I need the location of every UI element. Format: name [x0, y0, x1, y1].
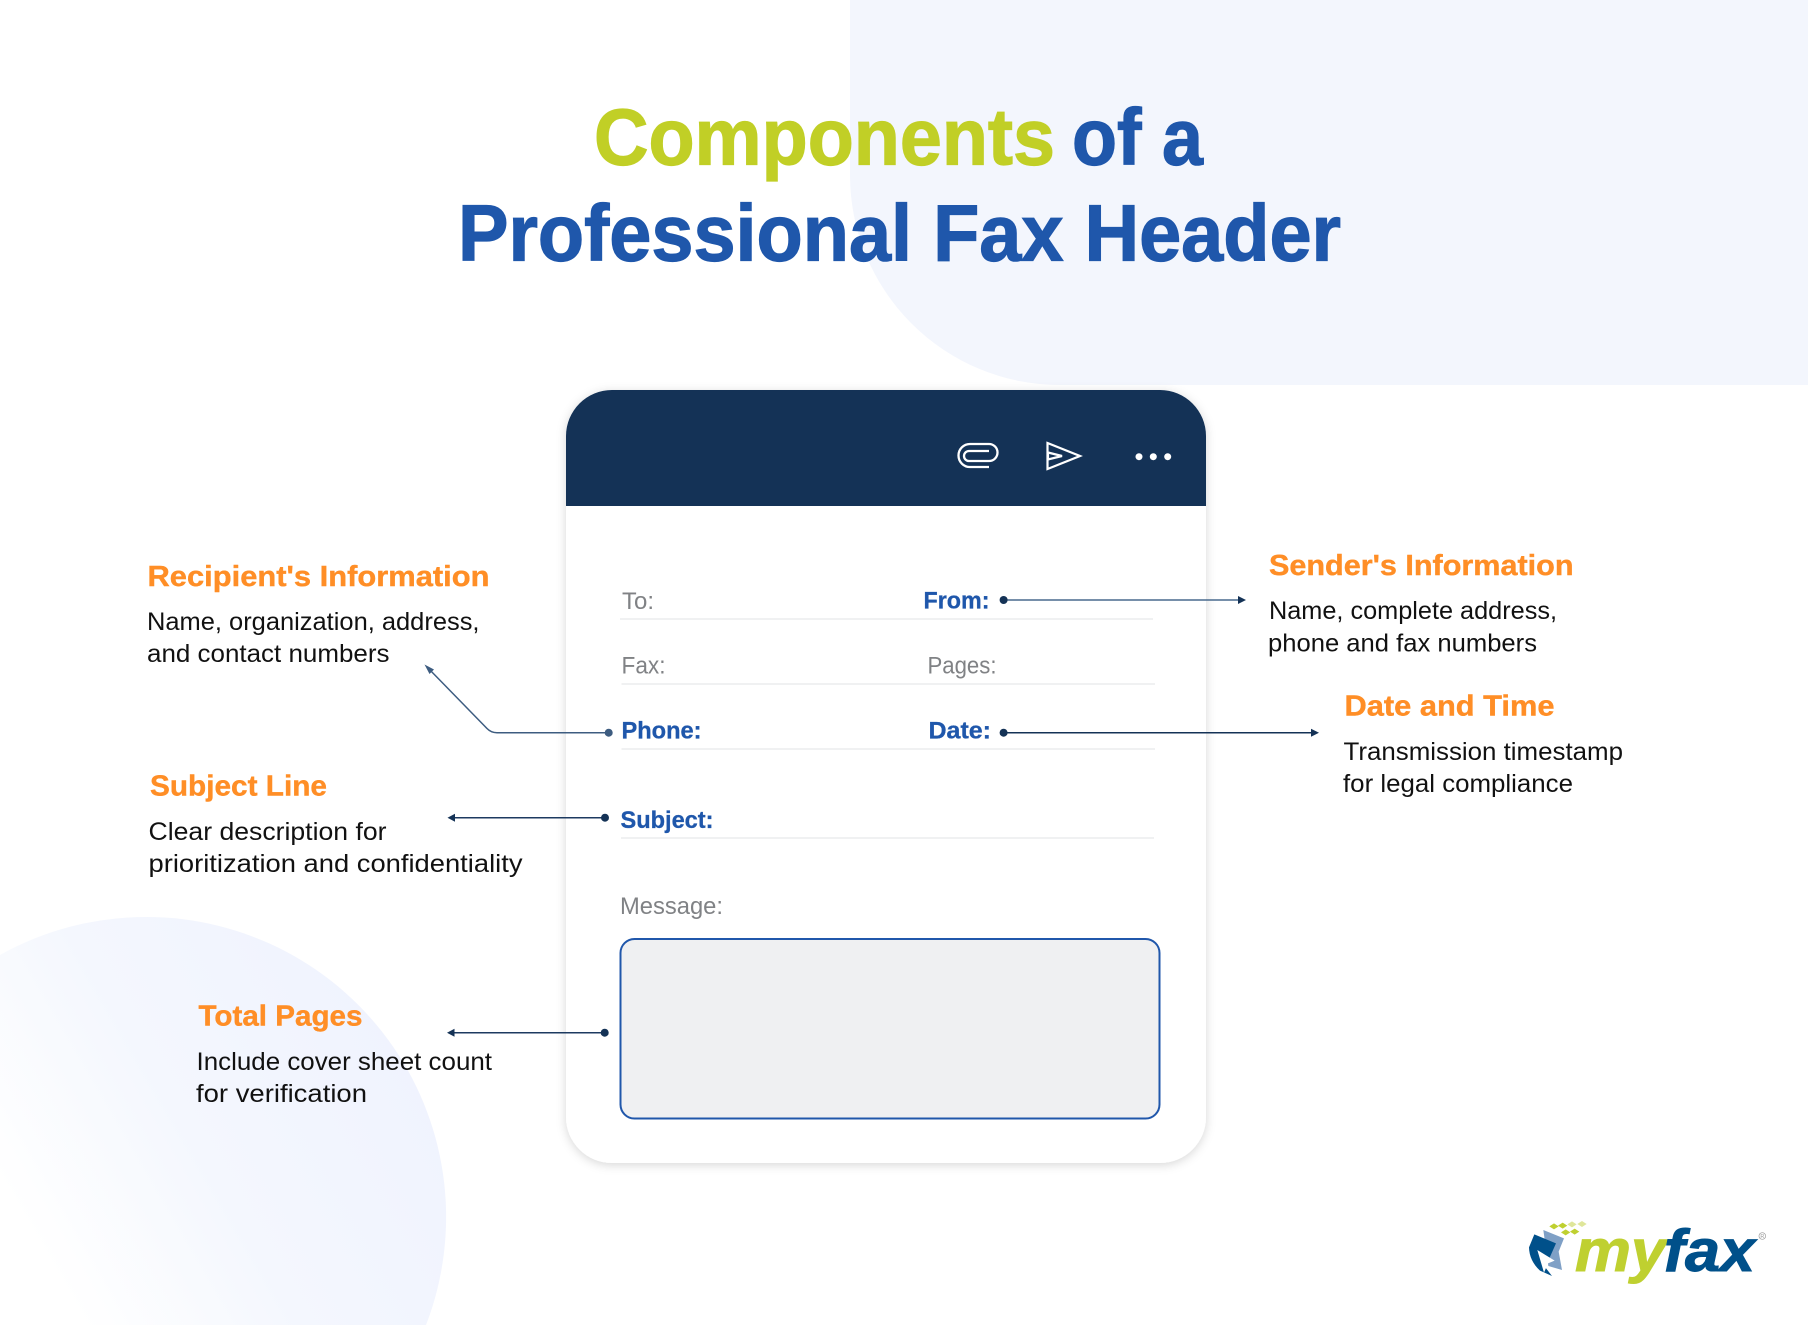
- callout: recipient's information: Name, organization, address,: [147, 608, 480, 636]
- callout: sender's information: Name, complete address,: [1269, 597, 1557, 625]
- arrow: phone to recipient information: [424, 664, 613, 737]
- callout: date and time: [1343, 690, 1623, 798]
- callout: date and time: for legal compliance: [1343, 770, 1573, 798]
- field rules: [620, 619, 1155, 838]
- background shape: top right: [850, 0, 1808, 385]
- callout: total pages: [196, 1000, 492, 1108]
- icon: paperclip: [958, 444, 998, 467]
- panel: fax form card: [566, 390, 1206, 1163]
- callout: date and time: Date and Time: [1344, 690, 1554, 722]
- field: To: To:: [622, 588, 654, 615]
- field: Phone: Phone:: [622, 718, 702, 744]
- card header bar: [566, 390, 1206, 506]
- callout: total pages: for verification: [196, 1080, 367, 1108]
- icon: send: [1048, 443, 1080, 469]
- arrow: message box to total pages: [447, 1029, 609, 1037]
- icon: logo mark: R: [1760, 1234, 1764, 1240]
- icon: logo mark: [1529, 1221, 1766, 1276]
- title: Components: [594, 92, 1055, 182]
- logo: myfax: fax: [1664, 1218, 1757, 1284]
- callout: total pages: Include cover sheet count: [196, 1048, 492, 1076]
- background shape: bottom left circle: [0, 917, 446, 1325]
- field: Message: Message:: [620, 893, 723, 920]
- field: Date: Date:: [928, 718, 991, 744]
- field: Pages: Pages:: [928, 652, 996, 680]
- callout: recipient's information: and contact numbers: [147, 640, 390, 668]
- callout: date and time: Transmission timestamp: [1344, 738, 1623, 766]
- callout: total pages: Total Pages: [198, 1000, 362, 1032]
- logo: myfax: [1529, 1218, 1766, 1284]
- callout: sender's information: phone and fax numbers: [1268, 630, 1537, 658]
- field: Subject: Subject:: [620, 807, 714, 834]
- callout: sender's information: Sender's Information: [1269, 550, 1574, 582]
- arrow: date to date and time: [1000, 729, 1319, 737]
- callout: recipient's information: Recipient's Information: [148, 561, 490, 593]
- card body: [566, 390, 1206, 1163]
- field: Fax: Fax:: [622, 652, 666, 680]
- callout: subject line: prioritization and confidentiality: [148, 850, 523, 878]
- title: of a: [1072, 92, 1203, 182]
- title: [458, 92, 1341, 278]
- arrow: subject to subject line: [448, 814, 609, 822]
- callout: sender's information: [1268, 550, 1574, 658]
- callout: subject line: [148, 770, 523, 878]
- message box: [620, 939, 1160, 1118]
- callout: subject line: Clear description for: [148, 818, 386, 846]
- callout: recipient's information: [147, 561, 490, 668]
- logo wordmark: my: [1575, 1218, 1669, 1284]
- callout: subject line: Subject Line: [150, 770, 327, 802]
- field: From: From:: [924, 588, 990, 614]
- title: Professional Fax Header: [458, 188, 1341, 278]
- icon: more dots: [1136, 453, 1171, 460]
- arrow: from to sender's information: [1000, 596, 1246, 604]
